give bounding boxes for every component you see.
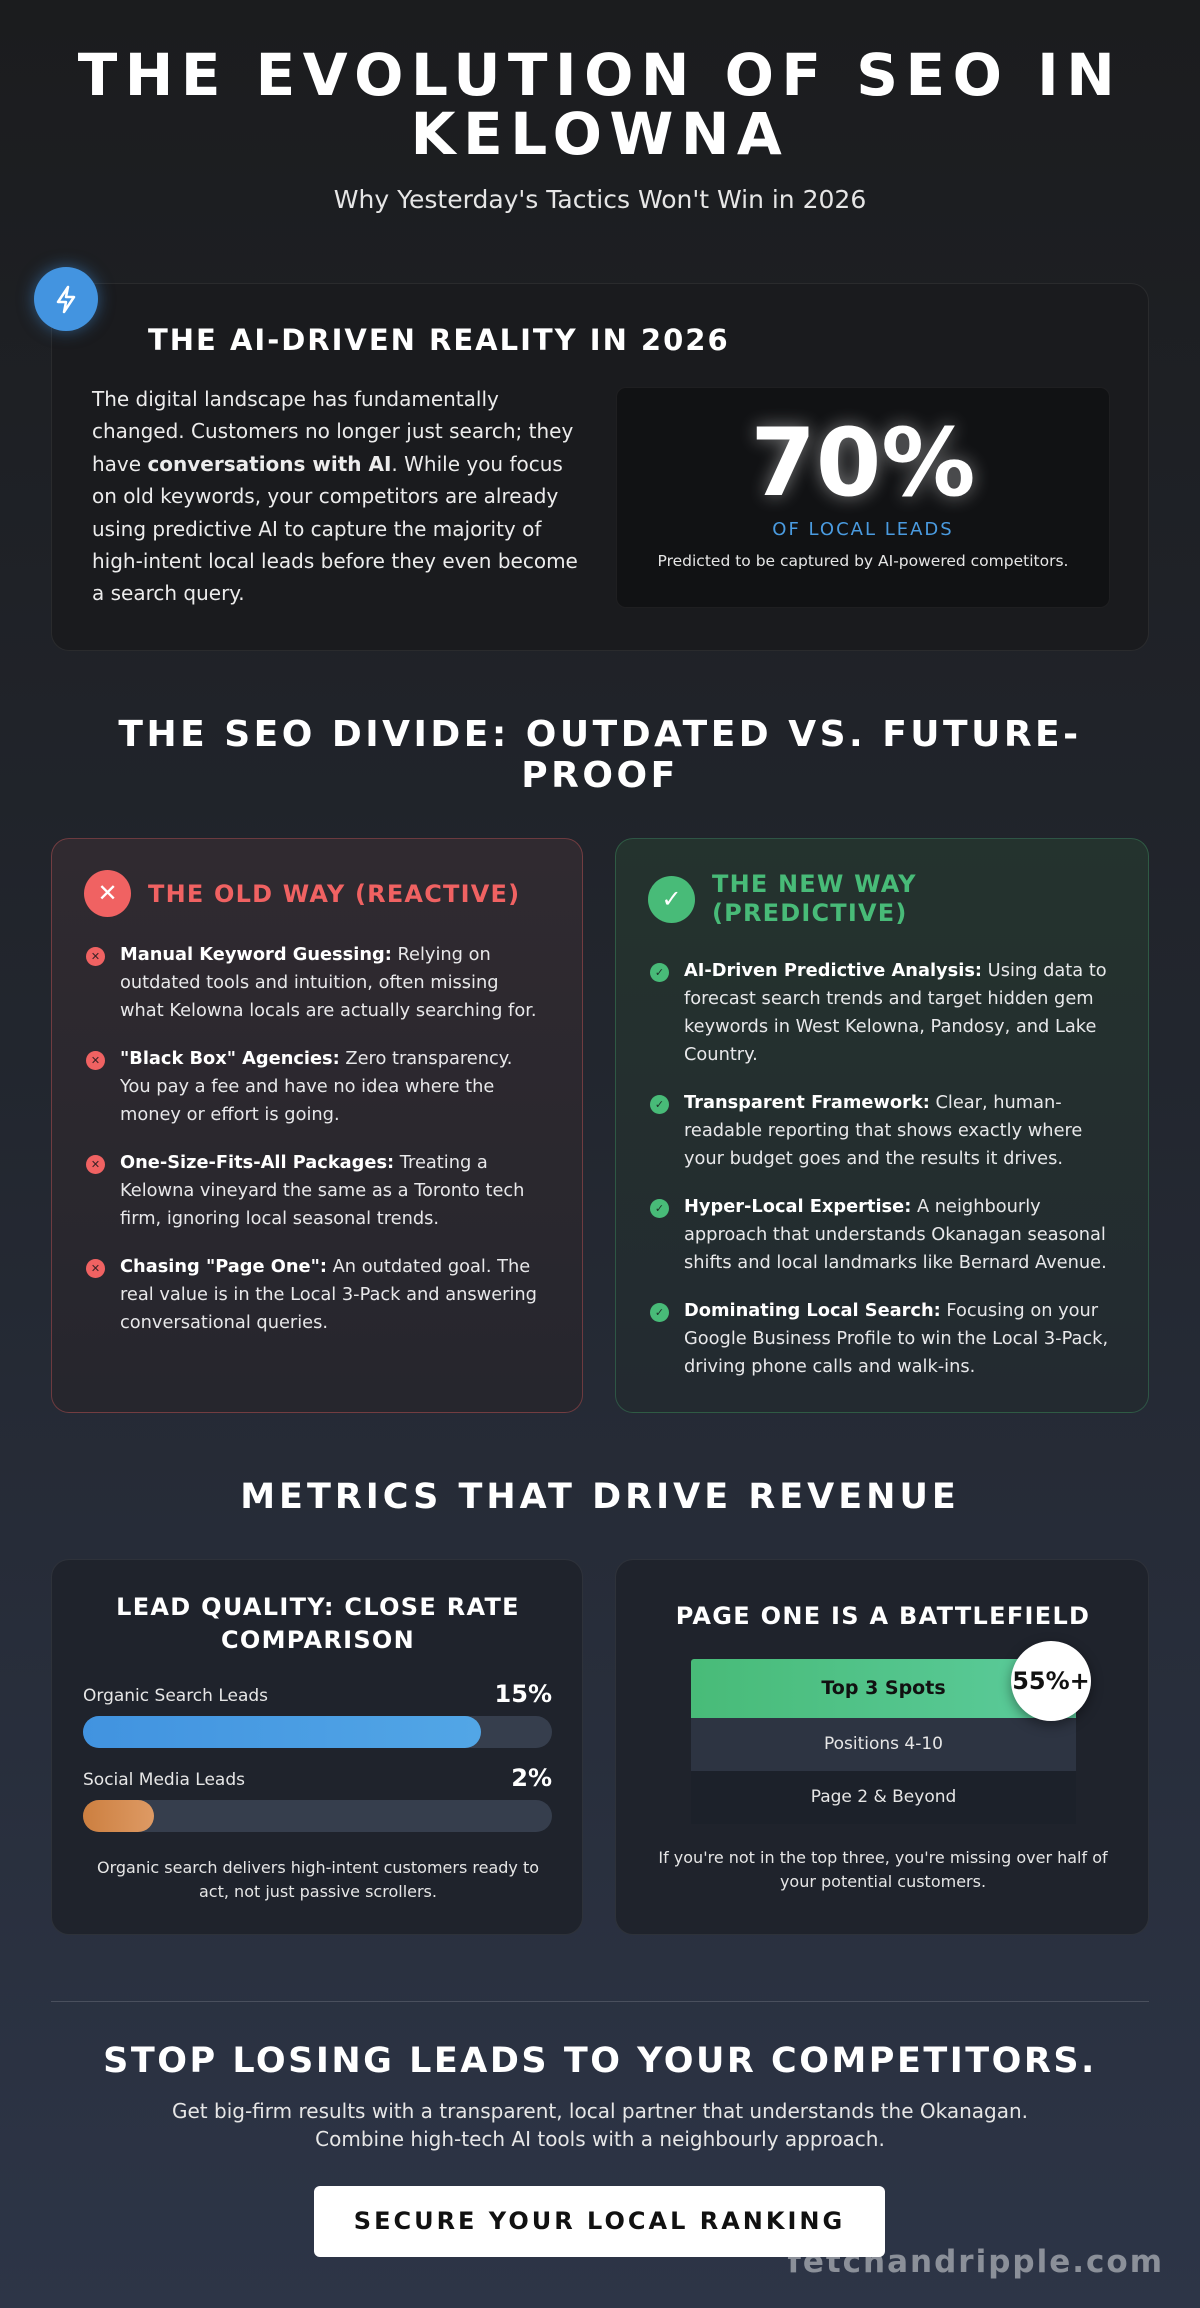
stat box — [616, 387, 1110, 608]
CTA heading: STOP LOSING LEADS TO YOUR COMPETITORS. — [103, 2041, 1097, 2081]
panel: lead quality — [51, 1559, 583, 1935]
new way header: ✓ — [661, 885, 682, 913]
ranking chart — [691, 1641, 1091, 1807]
CTA text: Combine high-tech AI tools with a neighbourly approach. — [315, 2127, 885, 2151]
ranking chart: Top 3 Spots — [821, 1677, 946, 1699]
bar chart: Organic Search Leads — [83, 1686, 268, 1706]
ranking chart: Positions 4-10 — [824, 1734, 943, 1754]
stat box: 70% — [750, 409, 976, 518]
new way header — [648, 870, 917, 927]
new way list: ✓ — [655, 1306, 664, 1319]
new way list: Transparent Framework: Clear, human-readable reporting that shows exactly where your budget goes and the results it drives. — [684, 1092, 1082, 1169]
stat box: OF LOCAL LEADS — [772, 519, 954, 540]
subtitle: Why Yesterday's Tactics Won't Win in 2026 — [334, 185, 866, 214]
CTA text — [172, 2099, 1028, 2151]
new way list: Hyper-Local Expertise: A neighbourly approach that understands Okanagan seasonal shifts and local landmarks like Bernard Avenue. — [684, 1196, 1107, 1273]
old way header: ✕ — [97, 879, 118, 907]
bar chart — [83, 1680, 552, 1832]
chart title: COMPARISON — [221, 1626, 415, 1654]
text block: The digital landscape has fundamentally changed. Customers no longer just search; they have conversations with AI. While you focus on old keywords, your competitors are already using predictive AI to capture the majority of high-intent local leads before they even become a search query. — [92, 387, 578, 605]
section heading: metrics: METRICS THAT DRIVE REVENUE — [240, 1477, 960, 1517]
old way list: Manual Keyword Guessing: Relying on outdated tools and intuition, often missing what Kelowna locals are actually searching for. — [120, 944, 537, 1021]
old way list — [86, 944, 537, 1333]
new way list: ✓ — [655, 1202, 664, 1215]
section heading: divide — [118, 714, 1082, 796]
bar chart: 15% — [495, 1680, 552, 1708]
watermark: fetchandripple.com — [787, 2244, 1164, 2280]
old way list: ✕ — [91, 1262, 100, 1275]
title — [78, 41, 1122, 168]
badge: 55%+ — [1012, 1667, 1090, 1695]
panel: AI-driven reality — [51, 283, 1149, 651]
title: THE EVOLUTION OF SEO IN — [78, 41, 1122, 109]
icon: lightning — [34, 267, 98, 331]
old way list: ✕ — [91, 1054, 100, 1067]
stat box: Predicted to be captured by AI-powered competitors. — [658, 552, 1068, 570]
heading: THE AI-DRIVEN REALITY IN 2026 — [148, 323, 730, 357]
old way list: "Black Box" Agencies: Zero transparency. You pay a fee and have no idea where the money or effort is going. — [120, 1048, 512, 1125]
chart title: PAGE ONE IS A BATTLEFIELD — [676, 1602, 1090, 1630]
section heading: divide: PROOF — [521, 755, 679, 796]
chart title — [116, 1593, 520, 1654]
bar chart: Social Media Leads — [83, 1770, 245, 1790]
old way header: THE OLD WAY (REACTIVE) — [148, 880, 520, 908]
section heading: divide: THE SEO DIVIDE: OUTDATED VS. FUTURE- — [118, 714, 1082, 755]
badge — [1011, 1641, 1091, 1721]
bar chart: 2% — [511, 1764, 552, 1792]
old way list: ✕ — [91, 950, 100, 963]
CTA text: Get big-firm results with a transparent, local partner that understands the Okanagan. — [172, 2099, 1028, 2123]
ranking chart: Page 2 & Beyond — [811, 1787, 956, 1807]
panel: old way — [51, 838, 583, 1413]
new way list: AI-Driven Predictive Analysis: Using data to forecast search trends and target hidden gem keywords in West Kelowna, Pandosy, and Lake Country. — [684, 960, 1107, 1065]
old way header — [84, 870, 520, 917]
caption: If you're not in the top three, you're missing over half of your potential customers. — [658, 1848, 1108, 1891]
old way list: Chasing "Page One": An outdated goal. The real value is in the Local 3-Pack and answering conversational queries. — [120, 1256, 537, 1333]
new way list: ✓ — [655, 1098, 664, 1111]
new way list — [650, 960, 1108, 1377]
new way list: Dominating Local Search: Focusing on your Google Business Profile to win the Local 3-Pack, driving phone calls and walk-ins. — [684, 1300, 1108, 1377]
old way list: ✕ — [91, 1158, 100, 1171]
CTA button: SECURE YOUR LOCAL RANKING — [354, 2207, 845, 2235]
panel: new way — [615, 838, 1149, 1413]
new way header: THE NEW WAY — [712, 870, 917, 898]
title: KELOWNA — [411, 100, 789, 168]
old way list: One-Size-Fits-All Packages: Treating a Kelowna vineyard the same as a Toronto tech firm, ignoring local seasonal trends. — [120, 1152, 524, 1229]
new way header: (PREDICTIVE) — [712, 899, 908, 927]
chart title: LEAD QUALITY: CLOSE RATE — [116, 1593, 520, 1621]
panel: battlefield — [615, 1559, 1149, 1935]
new way list: ✓ — [655, 966, 664, 979]
CTA button — [314, 2186, 885, 2257]
caption: Organic search delivers high-intent customers ready to act, not just passive scrollers. — [97, 1858, 539, 1901]
